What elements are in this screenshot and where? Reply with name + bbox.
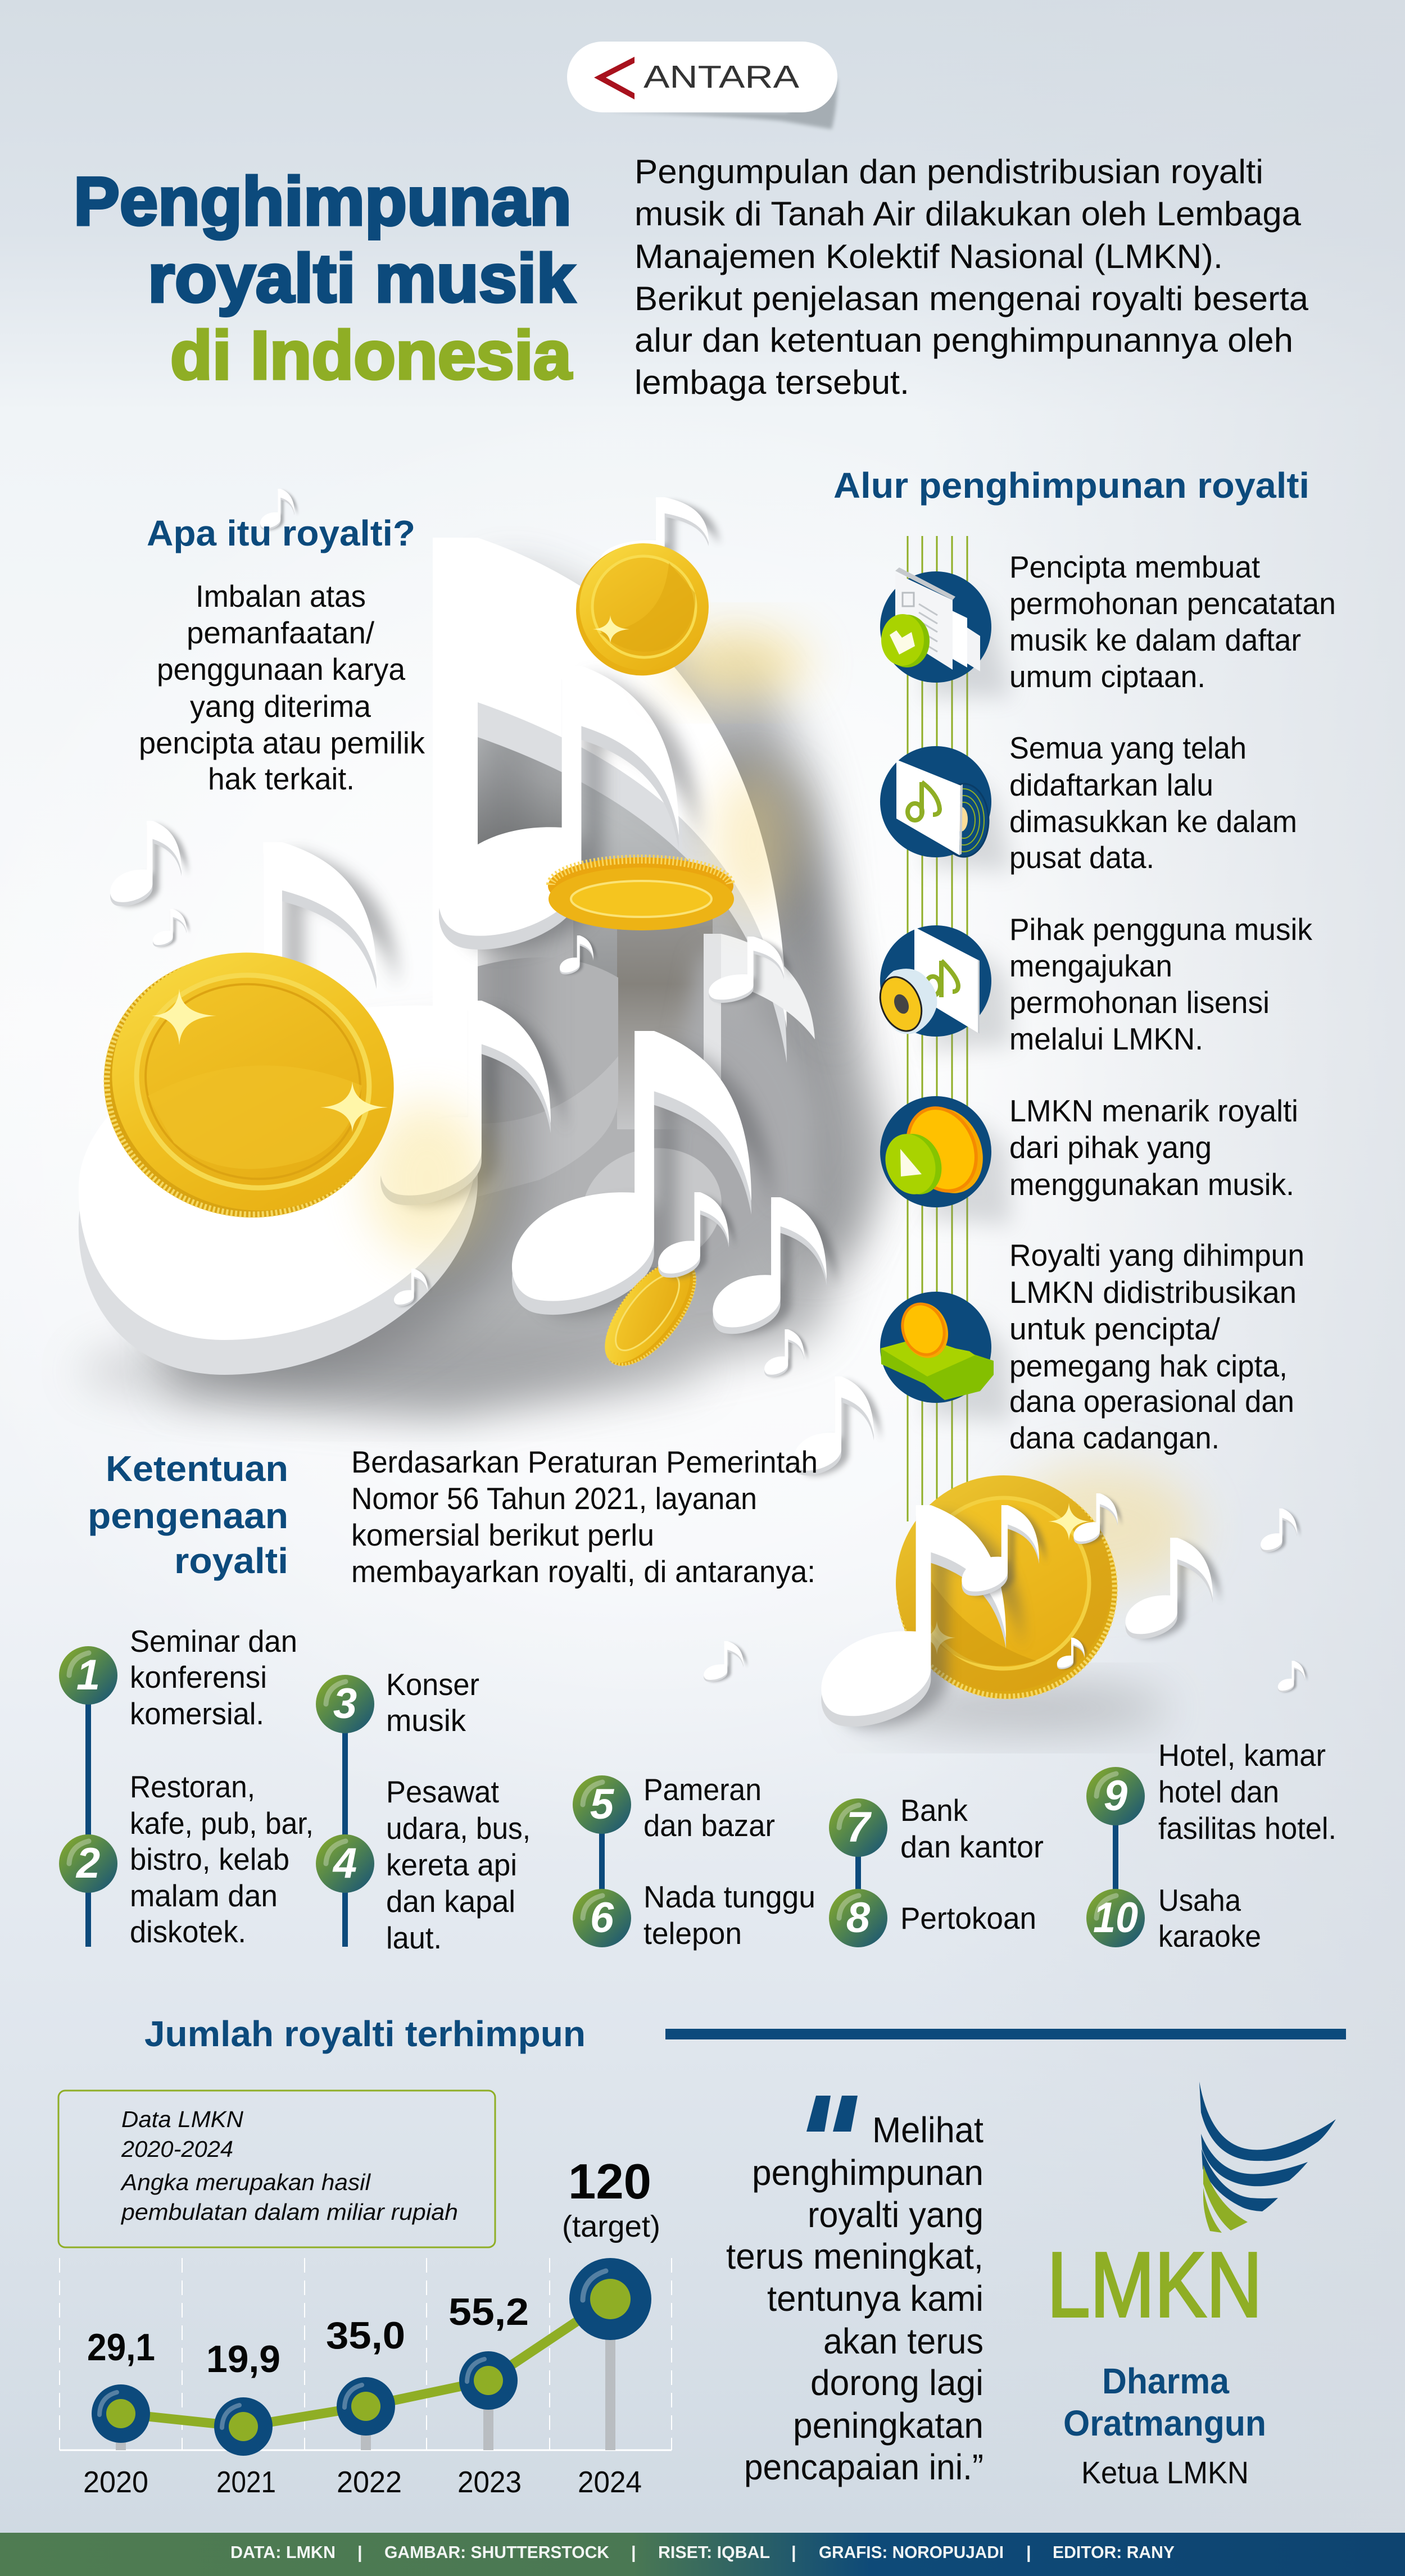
small note: above heading — [260, 489, 298, 530]
item 1: konferensi — [130, 1660, 267, 1694]
quote text: Melihat — [872, 2110, 984, 2150]
text: definition of royalty — [139, 579, 425, 796]
quote text: terus meningkat, — [726, 2236, 984, 2277]
values: 35,0 — [326, 2314, 405, 2357]
text: step 2: Semua yang telah — [1009, 730, 1247, 765]
item 4: Pesawat — [386, 1774, 499, 1809]
intro text: alur dan ketentuan penghimpunannya oleh — [634, 321, 1293, 359]
speaker name — [1063, 2361, 1266, 2490]
values: 120 — [568, 2154, 651, 2209]
coin: top — [565, 533, 719, 686]
quote text: akan terus — [823, 2321, 984, 2361]
item 1: komersial. — [130, 1696, 264, 1731]
note: above regulation text — [794, 1376, 881, 1475]
title: di Indonesia — [170, 317, 572, 393]
footer credits: | — [631, 2542, 636, 2562]
text: definition of royalty: yang diterima — [190, 689, 371, 724]
illustration: coin with notes, right — [704, 1452, 1307, 1727]
item 4: dan kapal — [386, 1884, 515, 1919]
footer credits: EDITOR: RANY — [1053, 2542, 1175, 2562]
note box: 2020-2024 — [121, 2136, 233, 2162]
icon: document — [880, 567, 1012, 697]
item 6: Nada tunggu — [643, 1879, 815, 1914]
item 9 — [1086, 1738, 1336, 1846]
text: step 2: dimasukkan ke dalam — [1009, 804, 1297, 839]
quote mark — [806, 2096, 858, 2132]
icon: speaker and music page — [873, 925, 1012, 1051]
note: largest — [79, 538, 837, 1375]
small note — [1278, 1661, 1307, 1692]
text: step 3: melalui LMKN. — [1009, 1021, 1203, 1056]
icon: music page and vinyl — [880, 746, 1012, 871]
text: step 2: pusat data. — [1009, 840, 1154, 875]
gray interior of the large notes — [478, 699, 815, 1292]
staff lines — [908, 536, 967, 1521]
footer credits: | — [791, 2542, 796, 2562]
quote text: dorong lagi — [810, 2363, 984, 2403]
panel: ketentuan pengenaan royalti — [59, 1444, 1336, 1955]
text: step 5: dana operasional dan — [1009, 1384, 1294, 1419]
icon: coin and money — [880, 1292, 1012, 1421]
item 1: 1 — [76, 1651, 100, 1699]
text: step 2 — [1009, 730, 1297, 875]
values: 19,9 — [206, 2338, 280, 2380]
item 8: Pertokoan — [900, 1901, 1036, 1936]
item 4: kereta api — [386, 1847, 517, 1882]
note: lower right — [713, 1197, 837, 1334]
item 8: 8 — [846, 1894, 871, 1942]
item 2: malam dan — [130, 1878, 278, 1913]
small note: left — [110, 821, 188, 906]
footer credits — [0, 2533, 1405, 2576]
note: second — [962, 1505, 1046, 1596]
item 9: hotel dan — [1158, 1774, 1279, 1809]
item 7: 7 — [846, 1803, 872, 1851]
item 2: diskotek. — [130, 1914, 246, 1949]
text: definition of royalty: hak terkait. — [208, 761, 355, 796]
quote text — [726, 2110, 984, 2487]
footer credits: DATA: LMKN — [230, 2542, 336, 2562]
text: step 3: permohonan lisensi — [1009, 985, 1270, 1020]
text: step 5: LMKN didistribusikan — [1009, 1275, 1297, 1310]
small note: right of flat coin — [709, 937, 791, 1003]
coin glow: bottom right — [854, 1466, 1197, 1733]
text: step 4: LMKN menarik royalti — [1009, 1093, 1298, 1128]
quote text: pencapaian ini.” — [744, 2447, 984, 2487]
quote text: peningkatan — [793, 2405, 984, 2446]
heading: Ketentuan — [106, 1448, 288, 1489]
note: right — [1126, 1538, 1221, 1639]
coin: small tilted — [589, 1245, 713, 1380]
item 7 — [829, 1793, 1044, 1864]
text: step 1: Pencipta membuat — [1009, 549, 1260, 584]
text: regulation: komersial berikut perlu — [351, 1518, 654, 1552]
heading: royalti — [174, 1541, 288, 1581]
item 6: telepon — [643, 1916, 742, 1951]
note: lower centre — [380, 1001, 566, 1205]
heading: Jumlah royalti terhimpun: Jumlah royalti terhimpun — [144, 2014, 586, 2054]
text: step 3 — [1009, 912, 1312, 1056]
intro text: lembaga tersebut. — [634, 364, 909, 401]
item 9: Hotel, kamar — [1158, 1738, 1326, 1773]
footer credits: | — [357, 2542, 362, 2562]
note: right back gray — [569, 934, 815, 1283]
item 5: dan bazar — [643, 1808, 775, 1843]
quote text: penghimpunan — [752, 2152, 984, 2193]
item 8 — [829, 1889, 1036, 1947]
text: regulation: membayarkan royalti, di antaranya: — [351, 1554, 815, 1589]
years: 2024 — [578, 2465, 642, 2499]
note: top behind coin — [600, 497, 719, 573]
swoosh — [1199, 2082, 1336, 2233]
values: (target) — [562, 2210, 660, 2243]
logo: LMKN — [1047, 2082, 1336, 2336]
wordmark: LMKN — [1047, 2233, 1262, 2336]
intro text: Manajemen Kolektif Nasional (LMKN). — [634, 238, 1223, 275]
speaker name: Dharma — [1102, 2361, 1229, 2401]
item 6 — [573, 1879, 815, 1951]
sparkle on top coin — [593, 615, 629, 643]
footer credits: | — [1026, 2542, 1031, 2562]
intro text: Pengumpulan dan pendistribusian royalti — [634, 153, 1263, 190]
coin glow — [365, 629, 809, 1259]
item 5: 5 — [590, 1780, 615, 1828]
heading: pengenaan — [88, 1496, 288, 1536]
note: upper centre — [439, 666, 701, 949]
text: step 4: menggunakan musik. — [1009, 1167, 1294, 1202]
item 1 — [59, 1624, 297, 1731]
sparkles — [919, 1503, 1090, 1655]
item 9: 9 — [1104, 1772, 1127, 1820]
item 5: Pameran — [643, 1772, 762, 1807]
text: step 1: umum ciptaan. — [1009, 659, 1205, 694]
years: 2023 — [457, 2465, 522, 2499]
title — [74, 163, 575, 393]
item 3: musik — [386, 1703, 466, 1738]
values — [87, 2154, 660, 2380]
text: step 5: dana cadangan. — [1009, 1420, 1220, 1455]
intro text: musik di Tanah Air dilakukan oleh Lembaga — [634, 195, 1302, 233]
text: step 3: mengajukan — [1009, 948, 1172, 983]
text: definition of royalty: penggunaan karya — [157, 652, 405, 687]
heading: Alur penghimpunan royalti — [833, 465, 1309, 506]
point 2024 — [569, 2258, 651, 2340]
item 2: Restoran, — [130, 1769, 255, 1804]
text: step 3: Pihak pengguna musik — [1009, 912, 1312, 947]
point 2020 — [92, 2384, 150, 2443]
heading: Apa itu royalti: Apa itu royalti? — [147, 513, 415, 553]
illustration: music notes and gold coins — [76, 489, 894, 1475]
speaker name: Ketua LMKN — [1081, 2455, 1249, 2490]
small note: bottom of big head — [394, 1269, 430, 1306]
panel: alur penghimpunan — [833, 465, 1336, 1521]
note box — [58, 2091, 495, 2247]
logo: ANTARA: ANTARA — [643, 59, 799, 95]
point 2023 — [459, 2351, 518, 2410]
item 3: 3 — [333, 1680, 357, 1728]
item 3: Konser — [386, 1667, 479, 1702]
small note: under flat coin — [560, 935, 596, 974]
text: definition of royalty: pemanfaatan/ — [187, 615, 375, 650]
item 2: bistro, kelab — [130, 1842, 289, 1877]
text: step 5: pemegang hak cipta, — [1009, 1348, 1288, 1383]
text: step 4 — [1009, 1093, 1298, 1202]
item 2: 2 — [75, 1839, 100, 1887]
sparkles on large coin — [152, 989, 388, 1132]
quote — [726, 2096, 984, 2487]
item 4: udara, bus, — [386, 1811, 531, 1846]
years: 2020 — [83, 2465, 148, 2499]
coin: flat — [548, 857, 734, 930]
icon: coin and play — [877, 1096, 1012, 1225]
item 2 — [59, 1769, 314, 1949]
item 4 — [316, 1774, 531, 1955]
quote text: royalti yang — [808, 2195, 984, 2235]
small note — [1261, 1509, 1300, 1552]
text: step 1: musik ke dalam daftar — [1009, 623, 1301, 657]
note: big — [821, 1505, 1023, 1727]
point 2021 — [214, 2397, 273, 2456]
item 4: laut. — [386, 1920, 442, 1955]
years: 2021 — [216, 2465, 276, 2499]
item 10: karaoke — [1158, 1919, 1261, 1953]
note: lower right main — [512, 1031, 773, 1315]
item 7: Bank — [900, 1793, 968, 1828]
years: 2022 — [337, 2465, 402, 2499]
connector stems — [85, 1675, 1118, 1947]
coin: large — [76, 921, 422, 1248]
point 2022 — [337, 2377, 395, 2436]
speaker name: Oratmangun — [1063, 2403, 1266, 2443]
intro text: Berikut penjelasan mengenai royalti beserta — [634, 280, 1309, 317]
text: step 5: untuk pencipta/ — [1009, 1311, 1221, 1346]
note: third — [1073, 1493, 1122, 1544]
small note — [704, 1641, 747, 1682]
text: step 1 — [1009, 549, 1336, 694]
small note: lowest — [764, 1329, 808, 1377]
text: step 5: Royalti yang dihimpun — [1009, 1238, 1304, 1273]
item 1: Seminar dan — [130, 1624, 297, 1659]
note box: Angka merupakan hasil — [120, 2169, 371, 2195]
values: 29,1 — [87, 2326, 155, 2369]
item 9: fasilitas hotel. — [1158, 1811, 1336, 1846]
quote text: tentunya kami — [767, 2278, 984, 2319]
item 6: 6 — [590, 1894, 614, 1942]
divider bar — [665, 2029, 1346, 2039]
years — [83, 2465, 642, 2499]
heading — [88, 1448, 288, 1581]
item 5 — [573, 1772, 775, 1843]
text: definition of royalty: Imbalan atas — [196, 579, 366, 614]
text: regulation — [351, 1444, 818, 1589]
footer credits: GAMBAR: SHUTTERSTOCK — [384, 2542, 610, 2562]
logo: ANTARA — [567, 42, 837, 129]
note box: pembulatan dalam miliar rupiah — [120, 2199, 458, 2225]
title: royalti musik — [148, 240, 575, 316]
item 10: Usaha — [1158, 1883, 1241, 1918]
text: step 4: dari pihak yang — [1009, 1130, 1212, 1165]
footer credits: GRAFIS: NOROPUJADI — [819, 2542, 1004, 2562]
text: step 2: didaftarkan lalu — [1009, 767, 1213, 802]
item 4: 4 — [332, 1839, 357, 1887]
text: step 5 — [1009, 1238, 1304, 1455]
small note — [1057, 1638, 1087, 1669]
intro text — [634, 153, 1309, 401]
values: 55,2 — [448, 2291, 529, 2333]
note: back left — [144, 842, 398, 1069]
line chart: royalty 2020-2024 — [60, 2154, 672, 2499]
title: Penghimpunan — [74, 163, 572, 239]
item 3 — [316, 1667, 479, 1738]
note box: Data LMKN — [121, 2106, 243, 2132]
item 10 — [1086, 1883, 1261, 1953]
footer credits: RISET: IQBAL — [658, 2542, 770, 2562]
big soft shadows behind notes — [79, 646, 894, 1416]
item 7: dan kantor — [900, 1829, 1044, 1864]
item 2: kafe, pub, bar, — [130, 1806, 314, 1841]
coin: bottom right — [871, 1452, 1141, 1722]
note: over small coin — [658, 1192, 736, 1278]
text: regulation: Berdasarkan Peraturan Pemerintah — [351, 1444, 818, 1479]
text: definition of royalty: pencipta atau pemilik — [139, 725, 425, 760]
text: regulation: Nomor 56 Tahun 2021, layanan — [351, 1481, 757, 1516]
item 10: 10 — [1093, 1894, 1138, 1942]
small note: left lower — [153, 909, 189, 947]
text: step 1: permohonan pencatatan — [1009, 586, 1336, 621]
